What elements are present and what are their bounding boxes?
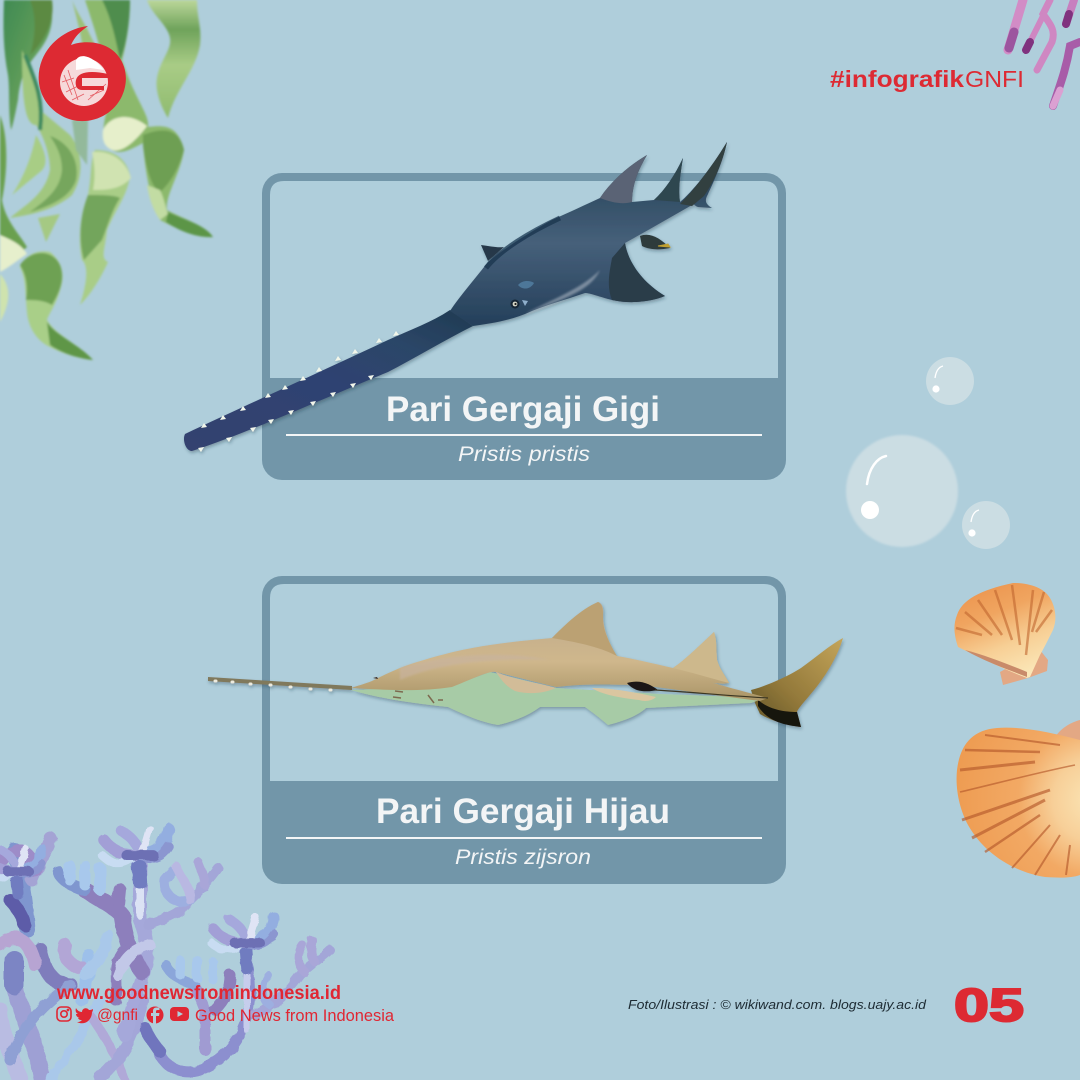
- icon: youtube: [170, 1007, 189, 1021]
- photo credit: Foto/Ilustrasi : © wikiwand.com. blogs.uajy.ac.id: [628, 997, 927, 1012]
- logo: [39, 26, 126, 121]
- tail: [751, 638, 843, 727]
- rostrum: [208, 677, 352, 690]
- panel: Pari Gergaji Hijau: [262, 576, 786, 884]
- heading: Pari Gergaji Gigi: Pari Gergaji Gigi: [386, 390, 660, 429]
- bubble: small: [962, 501, 1010, 549]
- bubbles: [846, 357, 1010, 549]
- fins: [496, 672, 556, 693]
- scientific name: Pristis zijsron: Pristis zijsron: [455, 846, 591, 869]
- panel: Pari Gergaji Gigi: [262, 173, 786, 480]
- icon: instagram: [57, 1007, 71, 1021]
- teeth: [198, 331, 399, 452]
- fish: Pari Gergaji Hijau: [208, 602, 843, 727]
- scientific name: Pristis pristis: Pristis pristis: [458, 443, 591, 466]
- hashtag: #infografik: [830, 66, 965, 92]
- icon: facebook: [146, 1006, 164, 1024]
- seaweed: top left: [0, 0, 213, 360]
- purple coral: top right: [1008, 0, 1080, 106]
- hashtag: GNFI: [965, 66, 1024, 92]
- body: [351, 602, 768, 701]
- footer: website and social: Good News from Indonesia: [195, 1006, 395, 1025]
- bubble: large: [846, 435, 958, 547]
- shell: lower: [957, 720, 1080, 878]
- fish: Pari Gergaji Gigi: [184, 142, 727, 452]
- coral: bottom left: [0, 829, 330, 1080]
- heading: Pari Gergaji Hijau: Pari Gergaji Hijau: [376, 792, 670, 831]
- footer: website and social: [56, 983, 395, 1025]
- hashtag: [830, 66, 1024, 92]
- bubble: top: [926, 357, 974, 405]
- logo emblem: [60, 56, 108, 106]
- page number: 05: [954, 979, 1024, 1031]
- belly: [351, 672, 765, 725]
- footer: website and social: @gnfi: [97, 1007, 138, 1024]
- icon: twitter: [76, 1008, 93, 1023]
- eye: [510, 281, 534, 308]
- shell: upper: [954, 583, 1055, 685]
- footer: website and social: www.goodnewsfromindonesia.id: [56, 983, 341, 1004]
